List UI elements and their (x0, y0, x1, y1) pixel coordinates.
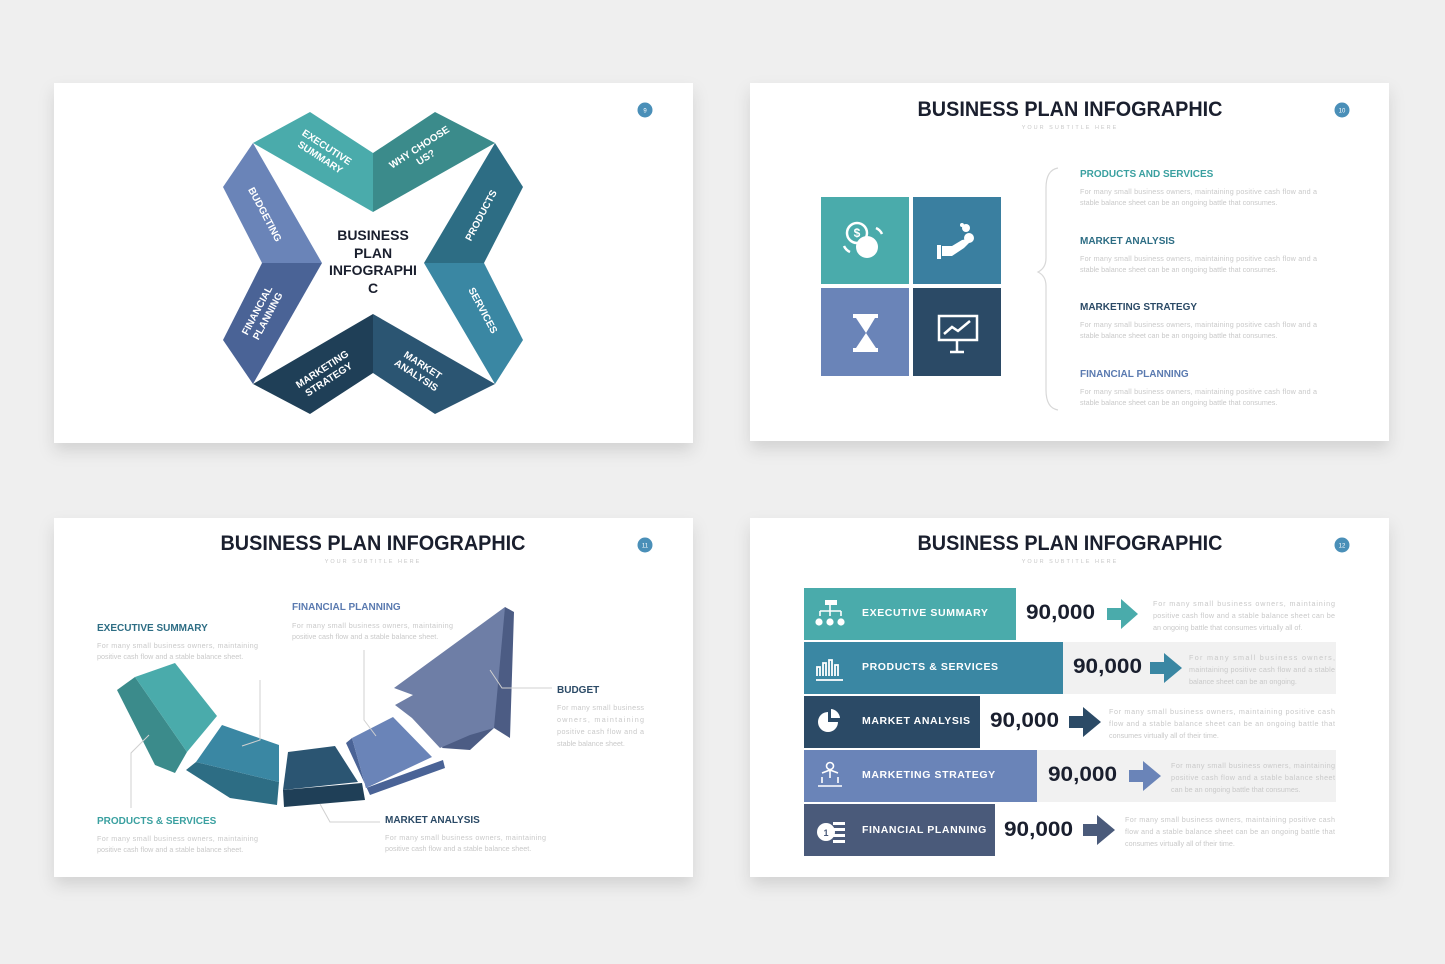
cross shape: ANALYSIS (392, 358, 440, 394)
text: budget: positive cash flow and a (557, 727, 644, 736)
row: marketing strategy (804, 750, 1336, 802)
panel: slide 11 arc arrow (54, 518, 693, 877)
text: executive summary (97, 623, 258, 661)
text: budget: For many small business (557, 703, 644, 712)
row: marketing strategy: MARKETING STRATEGY (862, 769, 996, 781)
page number 12 (1334, 538, 1350, 552)
row: market analysis: For many small business owners, maintaining positive cash (1109, 707, 1335, 716)
row: marketing strategy: For many small business owners, maintaining (1171, 761, 1335, 770)
text: market analysis: positive cash flow and a stable balance sheet. (385, 844, 531, 853)
icon: coins (844, 223, 882, 252)
text: market analysis: MARKET ANALYSIS (1080, 236, 1175, 247)
row: executive summary: an ongoing battle that consumes virtually all of. (1153, 623, 1302, 632)
page number 11 (638, 538, 652, 552)
cross shape: MARKETING (294, 349, 351, 391)
row: executive summary: positive cash flow and a stable balance sheet can be (1153, 611, 1335, 620)
row: products & services: balance sheet can be an ongoing. (1189, 677, 1297, 686)
text: marketing strategy: MARKETING STRATEGY (1080, 302, 1197, 313)
page number 12: 12 (1339, 544, 1346, 550)
text: financial planning: FINANCIAL PLANNING (292, 602, 401, 613)
center title: C (368, 280, 378, 296)
row: executive summary (804, 588, 1335, 640)
row: marketing strategy: can be an ongoing battle that consumes. (1171, 785, 1300, 794)
center title: BUSINESS (337, 227, 409, 243)
row: financial planning: consumes virtually all of their time. (1125, 839, 1235, 848)
row: products & services: 90,000 (1073, 655, 1142, 678)
text: financial planning: For many small business owners, maintaining positive cash flow and a (1080, 387, 1317, 396)
cross shape: WHY CHOOSE (388, 124, 452, 171)
text: financial planning: FINANCIAL PLANNING (1080, 369, 1189, 380)
text: financial planning: positive cash flow and a stable balance sheet. (292, 632, 438, 641)
text: marketing strategy: stable balance sheet can be an ongoing battle that consumes. (1080, 331, 1277, 340)
icon grid: $ (854, 226, 861, 240)
cross shape: US? (415, 148, 438, 168)
subtitle: YOUR SUBTITLE HERE (325, 559, 421, 565)
text: market analysis: For many small business owners, maintaining (385, 833, 546, 842)
page number 10 (1334, 102, 1350, 118)
brace (1038, 168, 1058, 410)
icon: presentation board (939, 316, 977, 352)
text: products & services: For many small business owners, maintaining (97, 834, 258, 843)
text: products & services: PRODUCTS & SERVICES (97, 816, 217, 827)
cross shape: PRODUCTS (464, 188, 500, 243)
center title (329, 227, 417, 296)
center title: PLAN (354, 245, 392, 261)
text: market analysis (1080, 236, 1317, 274)
icon: hourglass (853, 314, 878, 352)
cross shape: FINANCIAL (240, 284, 275, 337)
panel: slide 10 icon grid (750, 83, 1389, 441)
row: financial planning: 1 (823, 828, 829, 838)
text: products and services: PRODUCTS AND SERVICES (1080, 169, 1214, 180)
icon grid (821, 197, 1001, 376)
row: products & services: For many small business owners, (1189, 653, 1335, 662)
row: marketing strategy: 90,000 (1048, 763, 1117, 786)
page number 10: 10 (1339, 108, 1346, 114)
text: financial planning (1080, 369, 1317, 407)
row: financial planning (804, 804, 1335, 856)
cross shape: STRATEGY (304, 361, 355, 399)
row: financial planning: For many small business owners, maintaining positive cash (1125, 815, 1335, 824)
cross shape: SUMMARY (295, 139, 345, 177)
cross shape: BUDGETING (245, 186, 283, 244)
page number 11: 11 (642, 544, 649, 550)
row: market analysis (804, 696, 1335, 748)
icon: hand with bubbles (937, 223, 974, 259)
row: financial planning: flow and a stable balance sheet can be an ongoing battle that (1125, 827, 1335, 836)
row: products & services: maintaining positive cash flow and a stable (1189, 665, 1335, 674)
row: market analysis: flow and a stable balance sheet can be an ongoing battle that (1109, 719, 1335, 728)
center title: INFOGRAPHI (329, 262, 417, 278)
cross shape: SERVICES (466, 286, 499, 336)
text: products and services (1080, 169, 1317, 207)
cross shape: MARKET (401, 350, 443, 382)
row: marketing strategy: positive cash flow and a stable balance sheet (1171, 773, 1335, 782)
text: budget (557, 685, 644, 748)
cross shape: PLANNING (251, 291, 286, 342)
cross shape: EXECUTIVE (300, 128, 353, 168)
panel: slide 12 bars (750, 518, 1389, 877)
row: executive summary: For many small business owners, maintaining (1153, 599, 1335, 608)
arc chart (117, 607, 514, 807)
text: financial planning (292, 602, 453, 641)
title: BUSINESS PLAN INFOGRAPHIC (918, 532, 1222, 555)
text: budget: BUDGET (557, 685, 599, 696)
page number 9: 9 (643, 108, 647, 114)
text: budget: owners, maintaining (557, 715, 644, 724)
row: executive summary: 90,000 (1026, 601, 1095, 624)
row: market analysis: MARKET ANALYSIS (862, 715, 971, 727)
text: executive summary: positive cash flow and a stable balance sheet. (97, 652, 243, 661)
row: financial planning: 90,000 (1004, 818, 1073, 841)
text: marketing strategy (1080, 302, 1317, 340)
title: BUSINESS PLAN INFOGRAPHIC (220, 532, 526, 555)
row: market analysis: 90,000 (990, 709, 1059, 732)
callout lines (131, 650, 552, 822)
text: products and services: stable balance sheet can be an ongoing battle that consumes. (1080, 198, 1277, 207)
text: products and services: For many small business owners, maintaining positive cash flow and a (1080, 187, 1317, 196)
text: market analysis: For many small business owners, maintaining positive cash flow and a (1080, 254, 1317, 263)
text: marketing strategy: For many small business owners, maintaining positive cash flow and a (1080, 320, 1317, 329)
text: executive summary: For many small business owners, maintaining (97, 641, 258, 650)
subtitle: YOUR SUBTITLE HERE (1022, 559, 1118, 565)
text: financial planning: stable balance sheet can be an ongoing battle that consumes. (1080, 398, 1277, 407)
row: financial planning: FINANCIAL PLANNING (862, 824, 987, 836)
row: executive summary: EXECUTIVE SUMMARY (862, 607, 988, 619)
row: products & services: PRODUCTS & SERVICES (862, 661, 999, 673)
subtitle: YOUR SUBTITLE HERE (1022, 125, 1118, 131)
title: BUSINESS PLAN INFOGRAPHIC (918, 98, 1222, 121)
text: financial planning: For many small business owners, maintaining (292, 621, 453, 630)
text: market analysis (385, 815, 546, 853)
text: products & services: positive cash flow and a stable balance sheet. (97, 845, 243, 854)
row: products & services (804, 642, 1336, 694)
cross shape (223, 112, 523, 414)
text: market analysis: stable balance sheet can be an ongoing battle that consumes. (1080, 265, 1277, 274)
text: budget: stable balance sheet. (557, 739, 625, 748)
panel: slide 9 cross diagram (54, 83, 693, 443)
text: products & services (97, 816, 258, 854)
text: executive summary: EXECUTIVE SUMMARY (97, 623, 208, 634)
text: market analysis: MARKET ANALYSIS (385, 815, 480, 826)
row: market analysis: consumes virtually all of their time. (1109, 731, 1219, 740)
page number 9 (638, 102, 652, 118)
